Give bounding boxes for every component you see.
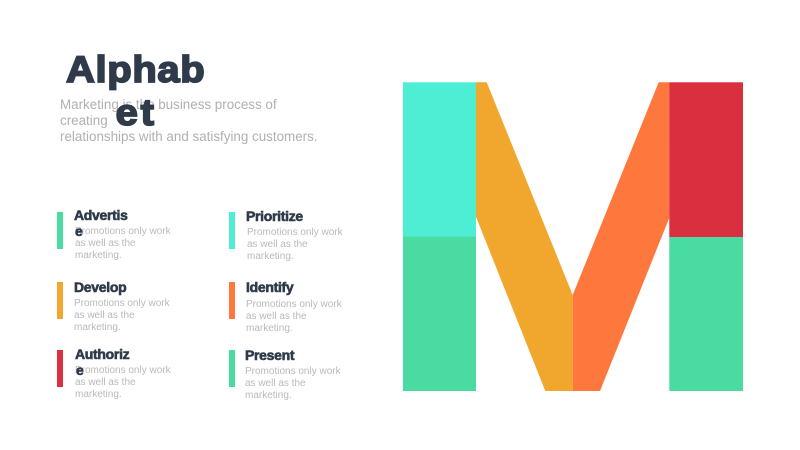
intro paragraph: relationships with and satisfying customers. xyxy=(60,129,318,144)
description: Promotions only work xyxy=(75,365,171,376)
title: Alphab xyxy=(66,49,205,90)
heading: e xyxy=(75,223,82,239)
description: marketing. xyxy=(75,389,122,400)
marker bar xyxy=(229,350,235,387)
item: Prioritize xyxy=(229,208,343,262)
marker bar xyxy=(57,212,63,249)
heading: Authoriz xyxy=(75,346,129,362)
heading xyxy=(75,346,130,378)
description xyxy=(245,366,341,401)
item: Advertise xyxy=(57,207,171,261)
description: marketing. xyxy=(246,323,293,334)
description: Promotions only work xyxy=(246,299,342,310)
intro paragraph: Marketing is the business process of xyxy=(60,97,277,112)
letter M graphic xyxy=(403,82,743,391)
item: Authorize xyxy=(57,346,171,400)
description: as well as the xyxy=(75,377,136,388)
description: as well as the xyxy=(245,378,306,389)
description: Promotions only work xyxy=(74,298,170,309)
marker bar xyxy=(229,282,235,319)
heading: Advertis xyxy=(74,207,128,223)
item: Develop xyxy=(57,279,170,333)
marker bar xyxy=(57,350,63,387)
heading: e xyxy=(76,362,84,378)
description xyxy=(75,365,171,400)
description: as well as the xyxy=(75,238,136,249)
description: as well as the xyxy=(247,239,308,250)
intro paragraph: creating xyxy=(60,113,108,128)
description: marketing. xyxy=(247,251,294,262)
title xyxy=(66,49,205,133)
marker bar xyxy=(57,282,63,319)
marker bar xyxy=(229,212,235,249)
item: Identify xyxy=(229,279,342,334)
title: et xyxy=(116,92,157,133)
description: as well as the xyxy=(74,310,135,321)
description xyxy=(75,226,171,261)
description xyxy=(247,227,343,262)
description: Promotions only work xyxy=(245,366,341,377)
item: Present xyxy=(229,347,341,401)
intro paragraph xyxy=(60,97,318,144)
description xyxy=(74,298,170,333)
heading: Identify xyxy=(246,279,293,295)
description: marketing. xyxy=(74,322,121,333)
description: marketing. xyxy=(75,250,122,261)
heading xyxy=(74,207,128,239)
description: Promotions only work xyxy=(75,226,171,237)
heading: Develop xyxy=(74,279,126,295)
description: as well as the xyxy=(246,311,307,322)
heading: Present xyxy=(245,347,294,363)
description xyxy=(246,299,342,334)
description: Promotions only work xyxy=(247,227,343,238)
heading: Prioritize xyxy=(246,208,303,224)
description: marketing. xyxy=(245,390,292,401)
